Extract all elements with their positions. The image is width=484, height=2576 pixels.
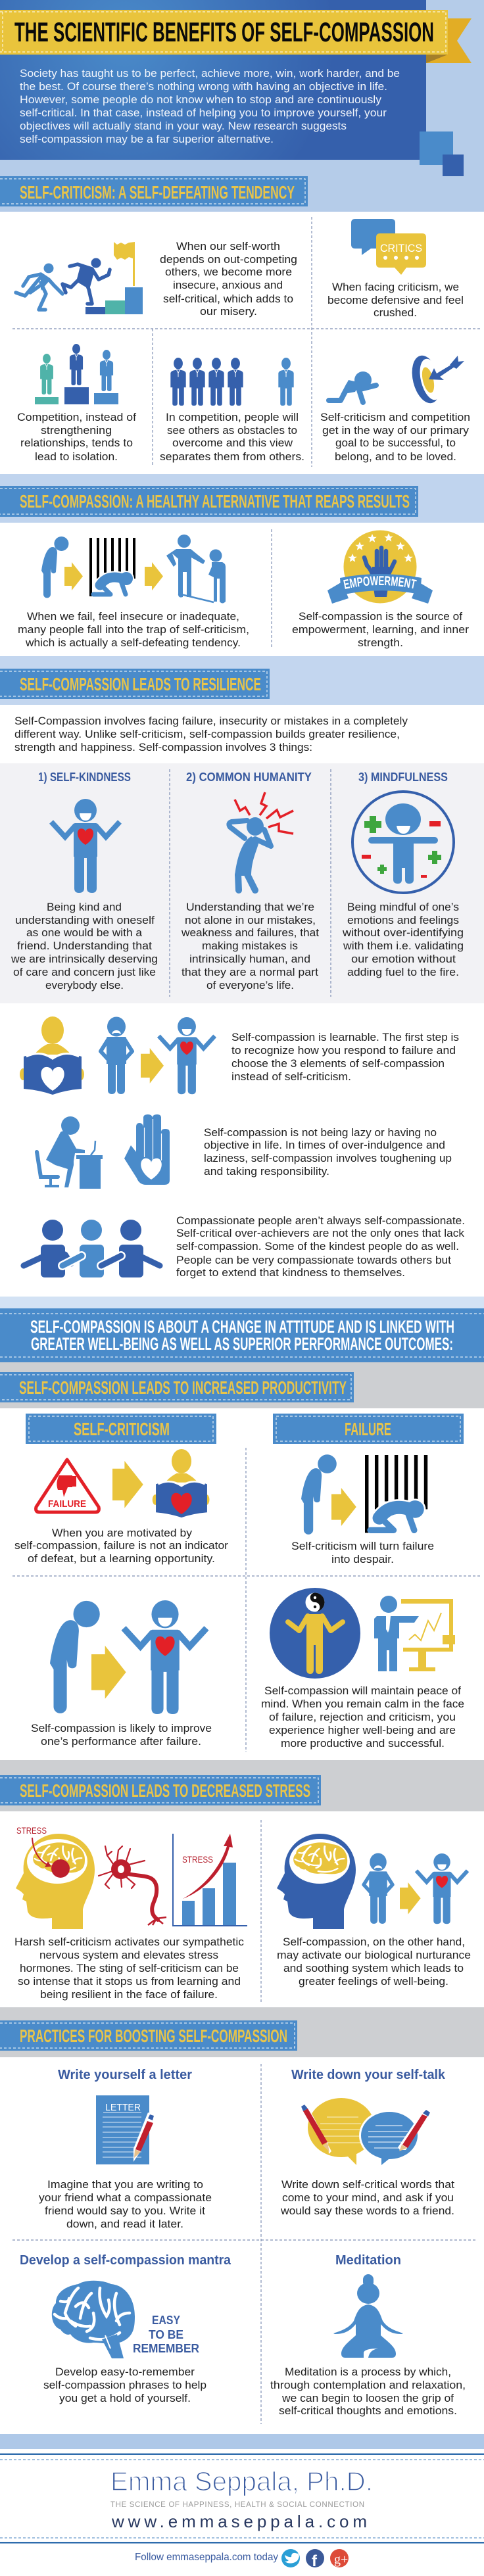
panel: stress — [14, 1825, 471, 2001]
text: primary goal: belong, and to be loved. — [335, 450, 456, 463]
text: nurturance: and soothing system which leads to — [283, 1962, 464, 1974]
icon: brain — [52, 2281, 135, 2358]
text: common humanity: that they are a normal part — [182, 966, 318, 978]
banner: change in attitude — [0, 1297, 484, 1362]
text: self-talk: Write down self-critical words that — [281, 2178, 454, 2191]
icon: person at desk — [37, 1116, 103, 1189]
text: empowerment: empowerment, learning, and inner — [292, 623, 469, 636]
icon: crawling person — [329, 371, 376, 402]
text: self-talk: come to your mind, and ask if you — [282, 2191, 454, 2204]
icon: hand with heart — [124, 1114, 170, 1185]
text: performance — [31, 1722, 212, 1748]
text: learning opportunity: When you are motivated by — [52, 1527, 192, 1539]
icon: calm head and persons — [277, 1834, 468, 1929]
section heading: resilience — [0, 656, 484, 705]
intro text: self-critical. In that case, instead of helping you to improve yourself, your — [20, 107, 387, 119]
text: not lazy: objective in life. In times of over-indulgence and — [204, 1139, 445, 1151]
text: learnable: choose the 3 elements of self-compassion — [231, 1057, 445, 1070]
text: despair — [291, 1540, 434, 1565]
intro text: However, some people do not know when to stop and are continuously — [20, 93, 382, 106]
text: self-kindness: we are intrinsically deserving — [11, 953, 158, 965]
icon: failure warning sign: FAILURE — [48, 1498, 86, 1510]
text: peace of mind — [261, 1684, 464, 1750]
text: harsh self-criticism: Harsh self-criticism activates our sympathetic — [14, 1936, 245, 1948]
column: self-kindness: 1) SELF-KINDNESS — [38, 771, 131, 784]
text: facing criticism: become defensive and feel — [327, 294, 464, 306]
text: mindfulness — [342, 901, 464, 978]
text: peace of mind: more productive and successful. — [281, 1737, 445, 1750]
text: meditation: we can begin to loosen the grip of — [281, 2392, 454, 2404]
text: empowerment: Self-compassion is the source of — [299, 610, 462, 623]
text: despair: Self-criticism will turn failure — [291, 1540, 434, 1552]
text: obstacles: overcome and this view — [172, 437, 293, 449]
text: meditation: Meditation is a process by which, — [285, 2366, 451, 2378]
text: harsh self-criticism: being resilient in the face of failure. — [40, 1988, 218, 2001]
text: self-worth: depends on out-competing — [160, 253, 297, 266]
section heading: resilience: SELF-COMPASSION LEADS TO RESILIENCE — [20, 674, 261, 694]
column: mindfulness — [342, 771, 464, 978]
text: letter: down, and read it later. — [66, 2218, 183, 2230]
text: competition isolation — [17, 411, 136, 463]
text: compassionate people: Compassionate people aren’t always self-compassionate. — [176, 1214, 465, 1227]
heading: meditation: Meditation — [335, 2253, 401, 2268]
icon: failure to despair — [301, 1454, 427, 1535]
text: common humanity: not alone in our mistakes, — [185, 914, 316, 926]
text: self-kindness: as one would be with a — [26, 926, 143, 939]
text: mindfulness: emotions and feelings — [347, 914, 459, 926]
text: resilience intro: different way. Unlike self-criticism, self-compassion builds greater resilience, — [14, 728, 400, 740]
text: self-kindness: friend. Understanding that — [17, 940, 152, 952]
website: www.emmaseppala.com — [111, 2512, 367, 2531]
text: harsh self-criticism: so intense that it stops us from learning and — [18, 1975, 241, 1988]
subheading: failure: FAILURE — [345, 1419, 391, 1439]
icon: failure to self-criticism trap — [41, 535, 226, 604]
icon: critics speech bubbles — [351, 219, 426, 275]
text: mindfulness: our emotion without — [351, 953, 456, 965]
text: obstacles: see others as obstacles to — [167, 424, 297, 437]
icon: stressed head: STRESS — [16, 1825, 47, 1836]
text: empowerment: strength. — [358, 636, 403, 649]
section heading: practices: PRACTICES FOR BOOSTING SELF-COMPASSION — [20, 2026, 287, 2046]
intro text: the best. Of course there’s nothing wrong with having an objective in life. — [20, 80, 387, 93]
icon: letter and pencil — [96, 2095, 155, 2164]
intro text: self-compassion may be a far superior alternative. — [20, 133, 274, 145]
text: learning opportunity: of defeat, but a learning opportunity. — [28, 1552, 215, 1565]
text: learnable: Self-compassion is learnable. The first step is — [231, 1031, 459, 1043]
chart: rising stress — [173, 1834, 247, 1926]
text: peace of mind: of failure, rejection and criticism, you — [269, 1711, 456, 1723]
text: resilience intro: Self-Compassion involves facing failure, insecurity or mistakes in a completely — [14, 715, 408, 727]
text: facing criticism: crushed. — [374, 306, 417, 319]
header panel — [0, 0, 484, 212]
column: self-kindness — [11, 771, 158, 991]
icon: failure warning sign — [36, 1460, 99, 1512]
text: not lazy — [204, 1126, 452, 1178]
text: self-kindness: of care and concern just like — [13, 966, 156, 978]
text: common humanity: making mistakes is — [202, 940, 298, 952]
text: empowerment — [292, 610, 469, 649]
text: trap: When we fail, feel insecure or inadequate, — [27, 610, 239, 623]
text: harsh self-criticism: hormones. The sting of self-criticism can be — [20, 1962, 239, 1974]
icon: critics speech bubbles: CRITICS — [380, 242, 422, 254]
icon: neuron — [99, 1846, 166, 1925]
section heading: practices — [0, 2007, 484, 2057]
panel: self-criticism — [16, 219, 470, 463]
text: self-worth: insecure, anxious and — [173, 279, 283, 291]
text: letter: Imagine that you are writing to — [47, 2178, 203, 2191]
text: mantra — [43, 2366, 206, 2404]
text: self-kindness — [11, 901, 158, 991]
panel: productivity — [14, 1414, 464, 1750]
text: primary goal: goal to be successful, to — [335, 437, 456, 449]
icon: mindful person in circle — [352, 792, 454, 893]
text: self-worth — [160, 240, 297, 318]
intro text: objectives will actually stand in your way. New research suggests — [20, 120, 347, 132]
icon: sad to happy person — [101, 1016, 215, 1094]
text: facing criticism — [327, 281, 464, 319]
text: not lazy: and taking responsibility. — [204, 1165, 329, 1178]
icon: improved performance — [50, 1600, 206, 1714]
text: facing criticism: When facing criticism, we — [332, 281, 459, 293]
subheading: failure — [273, 1414, 464, 1444]
text: nurturance — [277, 1936, 471, 1988]
text: peace of mind: experience higher well-being and are — [269, 1724, 456, 1736]
section heading: healthy alternative — [0, 474, 484, 523]
icon: twitter — [281, 2549, 300, 2567]
icon: facebook — [306, 2549, 324, 2570]
column: common humanity: 2) COMMON HUMANITY — [186, 771, 312, 784]
text: mindfulness: with them i.e. validating — [343, 940, 464, 952]
author name: Emma Seppala, Ph.D. — [110, 2466, 373, 2496]
text: learning opportunity: self-compassion, failure is not an indicator — [14, 1539, 228, 1552]
text: self-worth: others, we become more — [165, 266, 292, 278]
icon: facebook: f — [312, 2552, 318, 2570]
icon: happy person with heart — [51, 799, 120, 893]
decorative squares — [420, 131, 464, 176]
icon: runners and steps — [16, 242, 143, 314]
text: common humanity — [181, 901, 319, 991]
text: meditation — [270, 2366, 466, 2417]
section heading: self-criticism: SELF-CRITICISM: A SELF-DEFEATING TENDENCY — [20, 182, 295, 203]
text: common humanity: weakness and failures, that — [181, 926, 319, 939]
text: not lazy: laziness, self-compassion involves toughening up — [204, 1152, 452, 1164]
text: compassionate people: self-compassion. Some of the kindest people do as well. — [176, 1240, 459, 1252]
text: mantra: self-compassion phrases to help — [43, 2379, 206, 2391]
text: performance: Self-compassion is likely to improve — [31, 1722, 212, 1734]
text: competition isolation: relationships, tends to — [20, 437, 133, 449]
footer — [0, 2434, 484, 2570]
icon: empowerment badge: EMPOWERMENT — [343, 576, 417, 589]
section heading: self-criticism — [0, 176, 308, 206]
text: letter: your friend what a compassionate — [39, 2191, 212, 2204]
text: obstacles — [160, 411, 304, 463]
icon: reader with red heart — [153, 1449, 209, 1517]
text: learnable — [231, 1031, 459, 1083]
text: self-talk: would say these words to a friend. — [280, 2205, 454, 2217]
section heading: productivity — [0, 1362, 484, 1408]
icon: yin yang person — [270, 1588, 360, 1679]
panel: healthy alternative — [18, 530, 469, 649]
text: compassionate people — [176, 1214, 465, 1279]
section heading: stress: SELF-COMPASSION LEADS TO DECREASED STRESS — [20, 1780, 310, 1801]
icon: group and lone person — [170, 358, 294, 406]
text: resilience intro: strength and happiness. Self-compassion involves 3 things: — [14, 741, 312, 753]
subheading: self-criticism: SELF-CRITICISM — [74, 1419, 170, 1439]
text: mantra: Develop easy-to-remember — [55, 2366, 195, 2378]
follow text: Follow emmaseppala.com today — [135, 2552, 278, 2563]
intro text: Society has taught us to be perfect, achieve more, win, work harder, and be — [20, 67, 400, 80]
text: self-kindness: understanding with oneself — [15, 914, 155, 926]
icon: google plus — [330, 2549, 349, 2567]
text: meditation: through contemplation and relaxation, — [270, 2379, 466, 2391]
text: obstacles: In competition, people will — [166, 411, 299, 423]
text: primary goal — [320, 411, 470, 463]
text: compassionate people: People can be very compassionate towards others but — [176, 1254, 451, 1266]
text: self-kindness: everybody else. — [45, 979, 124, 991]
text: nurturance: greater feelings of well-being. — [299, 1975, 448, 1988]
column: common humanity — [181, 771, 319, 991]
text: trap: which is actually a self-defeating tendency. — [25, 636, 241, 649]
arrow — [112, 1461, 143, 1508]
title ribbon — [0, 10, 472, 63]
text: harsh self-criticism — [14, 1936, 245, 2001]
intro text — [20, 67, 400, 145]
text: easy to be remember: REMEMBER — [133, 2342, 199, 2355]
text: nurturance: Self-compassion, on the other hand, — [283, 1936, 465, 1948]
text: common humanity: intrinsically human, and — [189, 953, 310, 965]
section heading: stress — [0, 1760, 484, 1811]
text: mantra: you get a hold of yourself. — [59, 2392, 191, 2404]
text: peace of mind: Self-compassion will maintain peace of — [264, 1684, 461, 1697]
icon: reader with heart book — [20, 1016, 84, 1095]
text: easy to be remember — [133, 2314, 199, 2355]
text: mindfulness: adding fuel to the fire. — [347, 966, 459, 978]
icon: target and arrow — [408, 352, 464, 406]
text: competition isolation: strengthening — [41, 424, 112, 437]
heading: write a letter: Write yourself a letter — [58, 2068, 192, 2082]
text: common humanity: Understanding that we’re — [186, 901, 314, 913]
heading: self-talk: Write down your self-talk — [291, 2068, 446, 2082]
text: not lazy: Self-compassion is not being lazy or having no — [204, 1126, 437, 1139]
text: easy to be remember: TO BE — [149, 2328, 183, 2341]
text: self-talk — [280, 2178, 454, 2217]
text: primary goal: get in the way of our primary — [322, 424, 470, 437]
panel: practices — [20, 2068, 466, 2417]
subheading: self-criticism — [26, 1414, 216, 1444]
text: compassionate people: Self-critical over-achievers are not the only ones that lack — [176, 1227, 465, 1239]
panel: learnable — [20, 1016, 465, 1279]
text: self-worth: self-critical, which adds to — [163, 293, 293, 305]
text: self-worth: When our self-worth — [176, 240, 280, 252]
icon: google plus: g+ — [334, 2552, 348, 2567]
text: competition isolation: lead to isolation. — [35, 450, 118, 463]
text: letter: friend would say to you. Write it — [45, 2205, 205, 2217]
tagline: THE SCIENCE OF HAPPINESS, HEALTH & SOCIAL CONNECTION — [110, 2501, 364, 2509]
text: self-worth: our misery. — [200, 305, 257, 318]
column: mindfulness: 3) MINDFULNESS — [358, 771, 448, 784]
text: trap: many people fall into the trap of self-criticism, — [18, 623, 249, 636]
text: easy to be remember: EASY — [152, 2314, 180, 2327]
icon: speech bubbles and pencils — [299, 2098, 430, 2165]
icon: empowerment badge — [327, 530, 433, 604]
panel: three elements — [0, 763, 484, 1003]
text: meditation: self-critical thoughts and emotions. — [279, 2404, 457, 2417]
text: self-kindness: Being kind and — [47, 901, 122, 913]
text: trap — [18, 610, 249, 649]
text: despair: into despair. — [331, 1553, 394, 1565]
text: learnable: instead of self-criticism. — [231, 1070, 351, 1083]
icon: person with headache — [229, 792, 293, 890]
text: peace of mind: mind. When you remain calm in the face — [261, 1698, 464, 1710]
text: performance: one’s performance after failure. — [41, 1735, 201, 1748]
text: letter — [39, 2178, 212, 2230]
text: primary goal: Self-criticism and competition — [320, 411, 470, 423]
icon: presenter with chart — [374, 1596, 455, 1671]
heading: mantra: Develop a self-compassion mantra — [20, 2253, 231, 2268]
text: obstacles: separates them from others. — [160, 450, 304, 463]
text: mindfulness: Being mindful of one’s — [347, 901, 459, 913]
text: common humanity: of everyone’s life. — [206, 979, 294, 991]
text: resilience intro — [14, 715, 408, 753]
icon: letter and pencil: LETTER — [105, 2102, 141, 2113]
text: learning opportunity — [14, 1527, 228, 1565]
icon: three people — [24, 1220, 160, 1277]
text: competition isolation: Competition, instead of — [17, 411, 136, 423]
text: compassionate people: forget to extend that kindness to themselves. — [176, 1266, 405, 1279]
text: mindfulness: without over-identifying — [342, 926, 464, 939]
text: learnable: to recognize how you respond to failure and — [231, 1044, 456, 1057]
icon: meditating figure — [333, 2274, 403, 2358]
icon: podium people — [35, 344, 118, 404]
icon: stressed head — [16, 1825, 95, 1929]
text: nurturance: may activate our biological nurturance — [277, 1949, 471, 1961]
text: harsh self-criticism: nervous system and elevates stress — [39, 1949, 218, 1961]
chart: rising stress: STRESS — [182, 1854, 213, 1865]
